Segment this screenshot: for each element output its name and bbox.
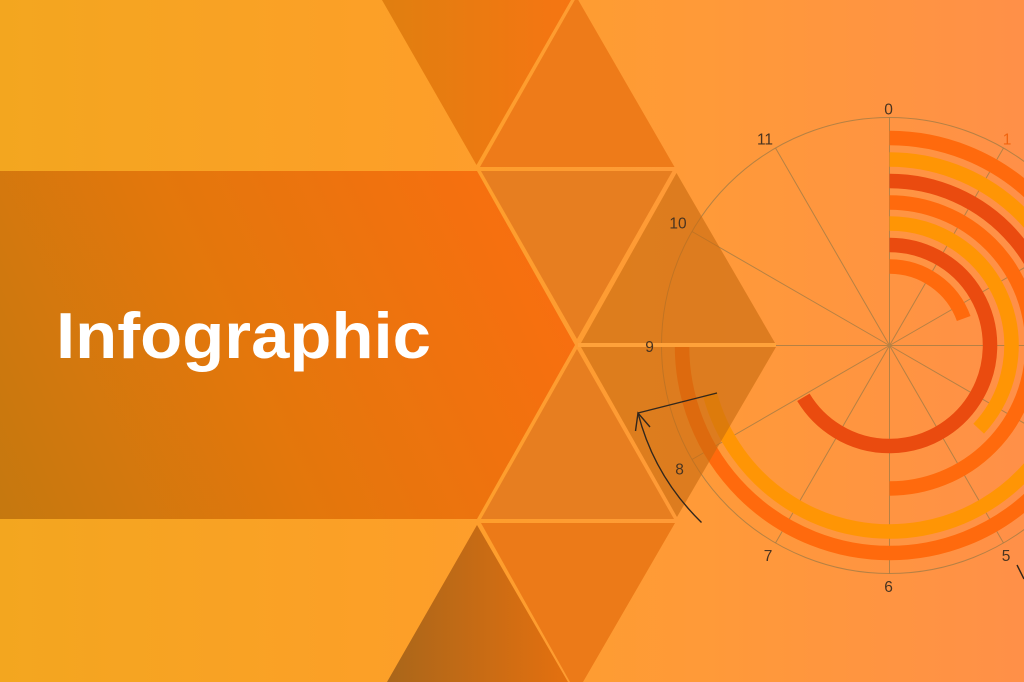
label 8: 8 <box>675 462 684 478</box>
label 6: 6 <box>884 579 893 596</box>
bottom dark triangle <box>387 525 568 682</box>
upper-right overlay triangle <box>581 173 775 343</box>
ring 3 <box>890 181 1024 374</box>
ring 1 <box>682 138 1024 553</box>
chart hour labels <box>645 102 1011 596</box>
arrow: left rotation indicator <box>636 393 717 522</box>
chart grid: circle and spokes <box>662 118 1024 574</box>
arrow: lower-right stroke <box>1017 565 1024 579</box>
ring 4 <box>890 202 1024 488</box>
label 11: 11 <box>757 132 773 148</box>
lower upright triangle <box>481 349 674 519</box>
ring 2 <box>710 160 1024 532</box>
label 9: 9 <box>645 339 654 356</box>
polar chart rings and grid <box>662 118 1024 574</box>
lower-right overlay triangle <box>581 347 776 517</box>
upper inverted triangle <box>481 171 672 339</box>
label 10: 10 <box>669 216 687 232</box>
bottom inverted shape <box>481 523 675 682</box>
ring 5 <box>890 224 1011 429</box>
ring 7 <box>890 266 964 318</box>
ring 6 <box>803 245 990 446</box>
central arrow band <box>0 171 575 519</box>
label 0: 0 <box>884 102 893 118</box>
title: Infographic <box>56 299 431 372</box>
top-right triangle <box>480 0 674 167</box>
label 7: 7 <box>764 548 772 565</box>
label 5: 5 <box>1002 548 1010 565</box>
label 1: 1 <box>1003 132 1011 148</box>
top-left triangle <box>382 0 571 165</box>
horizontal divider at nine o'clock <box>578 343 776 347</box>
